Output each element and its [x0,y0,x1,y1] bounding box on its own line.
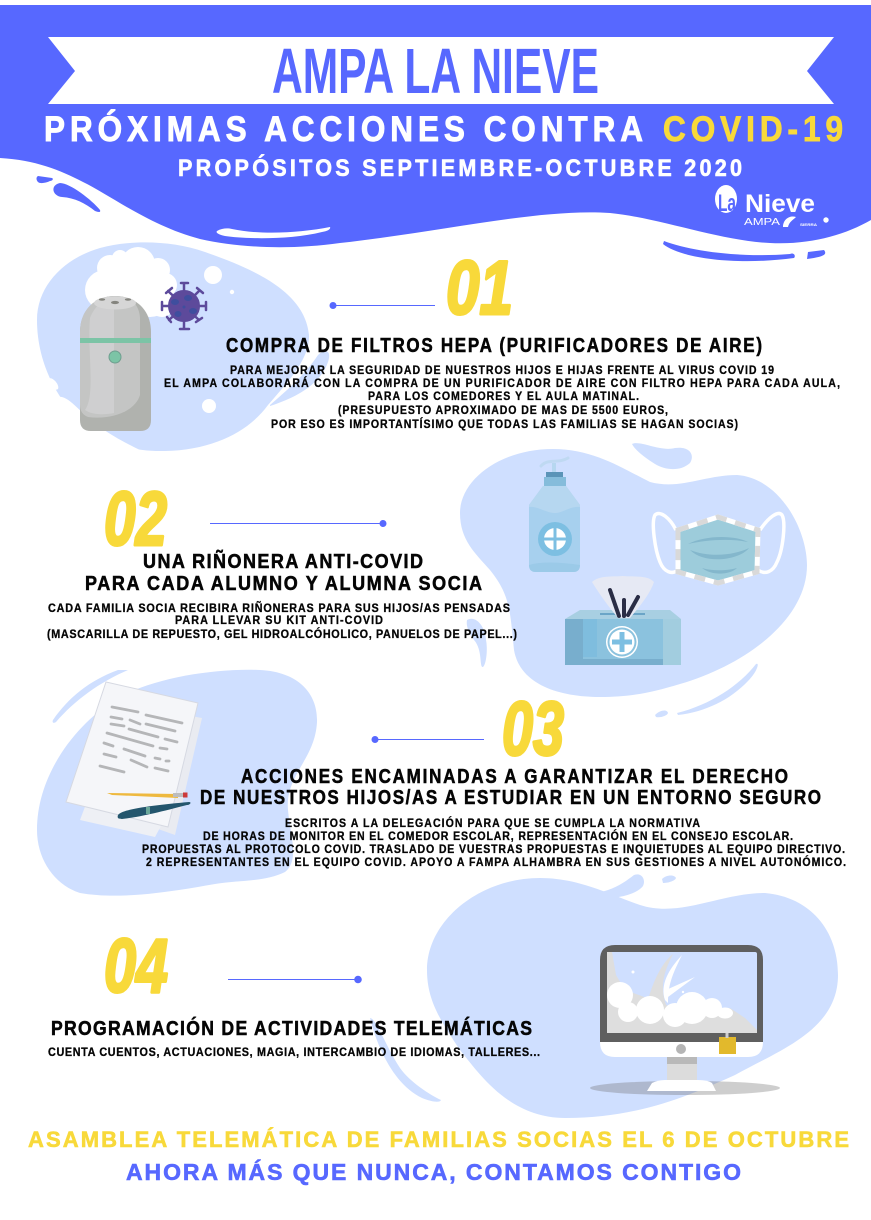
header wave background [0,5,871,247]
blob 3 [37,670,317,896]
icon: sanitizer bottle [529,458,580,572]
logo: Nieve [745,190,815,218]
footer [28,1127,849,1185]
blob 1 [37,242,309,451]
heading 2: UNA RIÑONERA ANTI-COVID [143,550,423,573]
splashes [467,443,758,717]
logo: AMPA [744,217,780,228]
text block 1: (PRESUPUESTO APROXIMADO DE MAS DE 5500 EUROS, [338,404,668,417]
section 3 [37,670,846,896]
section 2 [47,443,807,717]
splash [270,351,329,406]
text block 4: CUENTA CUENTOS, ACTUACIONES, MAGIA, INTERCAMBIO DE IDIOMAS, TALLERES... [48,1047,540,1059]
section 4 [48,874,838,1118]
number 01: 01 [446,246,513,331]
section 1 [37,242,840,451]
connector line 2 [210,520,386,527]
heading 2: PARA CADA ALUMNO Y ALUMNA SOCIA [85,573,482,595]
closing message: AHORA MÁS QUE NUNCA, CONTAMOS CONTIGO [126,1158,741,1185]
connector line 1 [330,302,435,309]
white cutouts [47,266,234,451]
text block 3: PROPUESTAS AL PROTOCOLO COVID. TRASLADO DE VUESTRAS PROPUESTAS E INQUIETUDES AL EQUIPO DIRECTIVO. [142,843,845,856]
text block 1: PARA MEJORAR LA SEGURIDAD DE NUESTROS HIJOS E HIJAS FRENTE AL VIRUS COVID 19 [230,364,774,377]
text block 2: CADA FAMILIA SOCIA RECIBIRA RIÑONERAS PARA SUS HIJOS/AS PENSADAS [48,601,510,615]
icon: face mask [653,513,784,583]
blue splashes below header [663,241,825,261]
title: AMPA LA NIEVE [272,35,599,107]
text block 2: (MASCARILLA DE REPUESTO, GEL HIDROALCÓHOLICO, PANUELOS DE PAPEL...) [47,627,517,641]
heading 2 [85,550,482,595]
splash [53,670,128,723]
text block 3 [142,816,846,869]
text block 3: DE HORAS DE MONITOR EN EL COMEDOR ESCOLAR, REPRESENTACIÓN EN EL CONSEJO ESCOLAR. [203,829,793,843]
icon: papers and pens [66,682,202,837]
blob 2 [460,449,807,697]
text block 1: EL AMPA COLABORARÁ CON LA COMPRA DE UN PURIFICADOR DE AIRE CON FILTRO HEPA PARA CADA AULA, [164,376,840,390]
text block 1: POR ESO ES IMPORTANTÍSIMO QUE TODAS LAS FAMILIAS SE HAGAN SOCIAS) [271,417,738,431]
text block 3: 2 REPRESENTANTES EN EL EQUIPO COVID. APOYO A FAMPA ALHAMBRA EN SUS GESTIONES A NIVEL AUTONÓMICO. [146,855,846,869]
assembly notice: ASAMBLEA TELEMÁTICA DE FAMILIAS SOCIAS EL 6 DE OCTUBRE [28,1127,849,1152]
text block 1 [164,364,840,431]
text block 2: PARA LLEVAR SU KIT ANTI-COVID [175,615,383,627]
icon: air purifier cloud [85,247,177,317]
number 03: 03 [502,687,564,772]
connector line 3 [372,736,484,743]
header panel [0,5,871,261]
heading 3: ACCIONES ENCAMINADAS A GARANTIZAR EL DERECHO [241,765,788,787]
logo: La [718,190,736,217]
heading 1: COMPRA DE FILTROS HEPA (PURIFICADORES DE AIRE) [226,334,762,356]
text block 1: PARA LOS COMEDORES Y EL AULA MATINAL. [368,390,639,403]
number 04: 04 [104,924,168,1009]
heading 3: DE NUESTROS HIJOS/AS A ESTUDIAR EN UN ENTORNO SEGURO [200,786,821,808]
covid label: COVID-19 [663,111,843,149]
blob 4 [427,878,838,1118]
logo [715,185,829,228]
splashes [370,874,676,1102]
blue splashes left [36,176,100,212]
title ribbon [48,37,834,104]
number 02: 02 [104,477,167,562]
logo: SIERRA [800,222,817,227]
text block 3: ESCRITOS A LA DELEGACIÓN PARA QUE SE CUMPLA LA NORMATIVA [285,816,700,830]
heading 3 [200,765,821,808]
subheading: PROPÓSITOS SEPTIEMBRE-OCTUBRE 2020 [178,154,742,181]
heading 4: PROGRAMACIÓN DE ACTIVIDADES TELEMÁTICAS [51,1017,532,1039]
heading line: PRÓXIMAS ACCIONES CONTRA [44,109,643,149]
connector line 4 [228,976,362,983]
white splash [217,227,330,238]
icon: tissue box [565,576,681,665]
icon: air purifier [80,296,151,431]
text block 2 [47,601,517,641]
icon: computer monitor [590,945,780,1095]
icon: virus [162,283,206,329]
